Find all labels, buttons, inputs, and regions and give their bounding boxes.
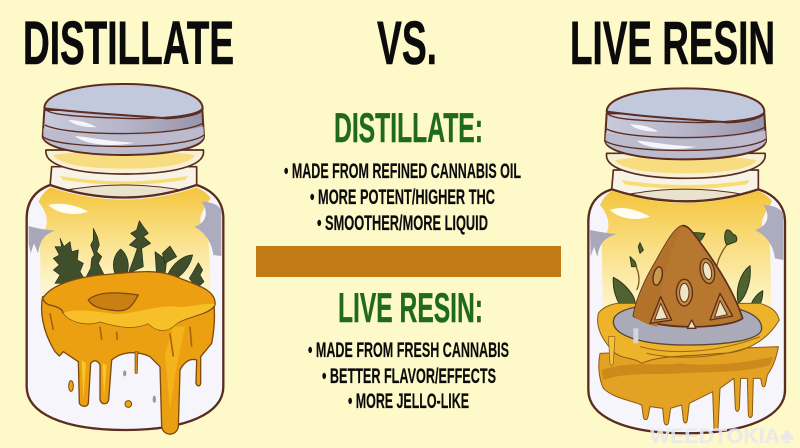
jar neck: [612, 170, 758, 202]
text: more jello-like: • MORE JELLO-LIKE: [348, 390, 469, 413]
lower resin mass: [599, 347, 778, 431]
glass shadows: [29, 226, 55, 253]
leaves: [53, 221, 204, 288]
cone holes: [676, 279, 692, 306]
metal disc: [613, 303, 762, 345]
upper resin folds: [598, 303, 779, 363]
illustration: distillate jar: [27, 84, 223, 434]
panel: live resin facts: [308, 284, 509, 413]
lid ring: [46, 150, 204, 174]
leaves: [613, 230, 763, 313]
text: better flavor: • BETTER FLAVOR/EFFECTS: [322, 365, 496, 388]
illustration: live resin jar: [588, 88, 785, 433]
watermark: WEEDTOKIA♣: [650, 425, 794, 448]
glass shadows: [590, 230, 617, 257]
liquid glow: [600, 191, 772, 330]
jar body: [588, 189, 785, 433]
title: vs.: VS.: [377, 9, 437, 77]
glass highlights: [610, 208, 650, 219]
lid ring: [606, 153, 765, 178]
resin top: [43, 272, 215, 330]
title: distillate: DISTILLATE: [23, 9, 234, 77]
jar body: [27, 185, 223, 430]
divider bar: [256, 246, 561, 277]
text: more potent: • MORE POTENT/HIGHER THC: [310, 186, 495, 209]
glass highlights: [48, 204, 88, 214]
jar lid: [43, 110, 204, 155]
jar neck: [50, 167, 197, 198]
heading: live resin: LIVE RESIN:: [338, 284, 483, 331]
text: smoother: • SMOOTHER/MORE LIQUID: [317, 212, 488, 235]
panel: distillate facts: [284, 104, 521, 235]
heading: distillate: DISTILLATE:: [334, 104, 483, 151]
droplets: [69, 381, 73, 391]
cone: [633, 226, 743, 327]
liquid glow: [38, 187, 212, 303]
resin lower body: [42, 297, 214, 434]
jar lid: [605, 113, 766, 159]
text: made from refined cannabis oil: • MADE FROM REFINED CANNABIS OIL: [284, 160, 521, 183]
text: made from fresh cannabis: • MADE FROM FRESH CANNABIS: [308, 339, 509, 362]
